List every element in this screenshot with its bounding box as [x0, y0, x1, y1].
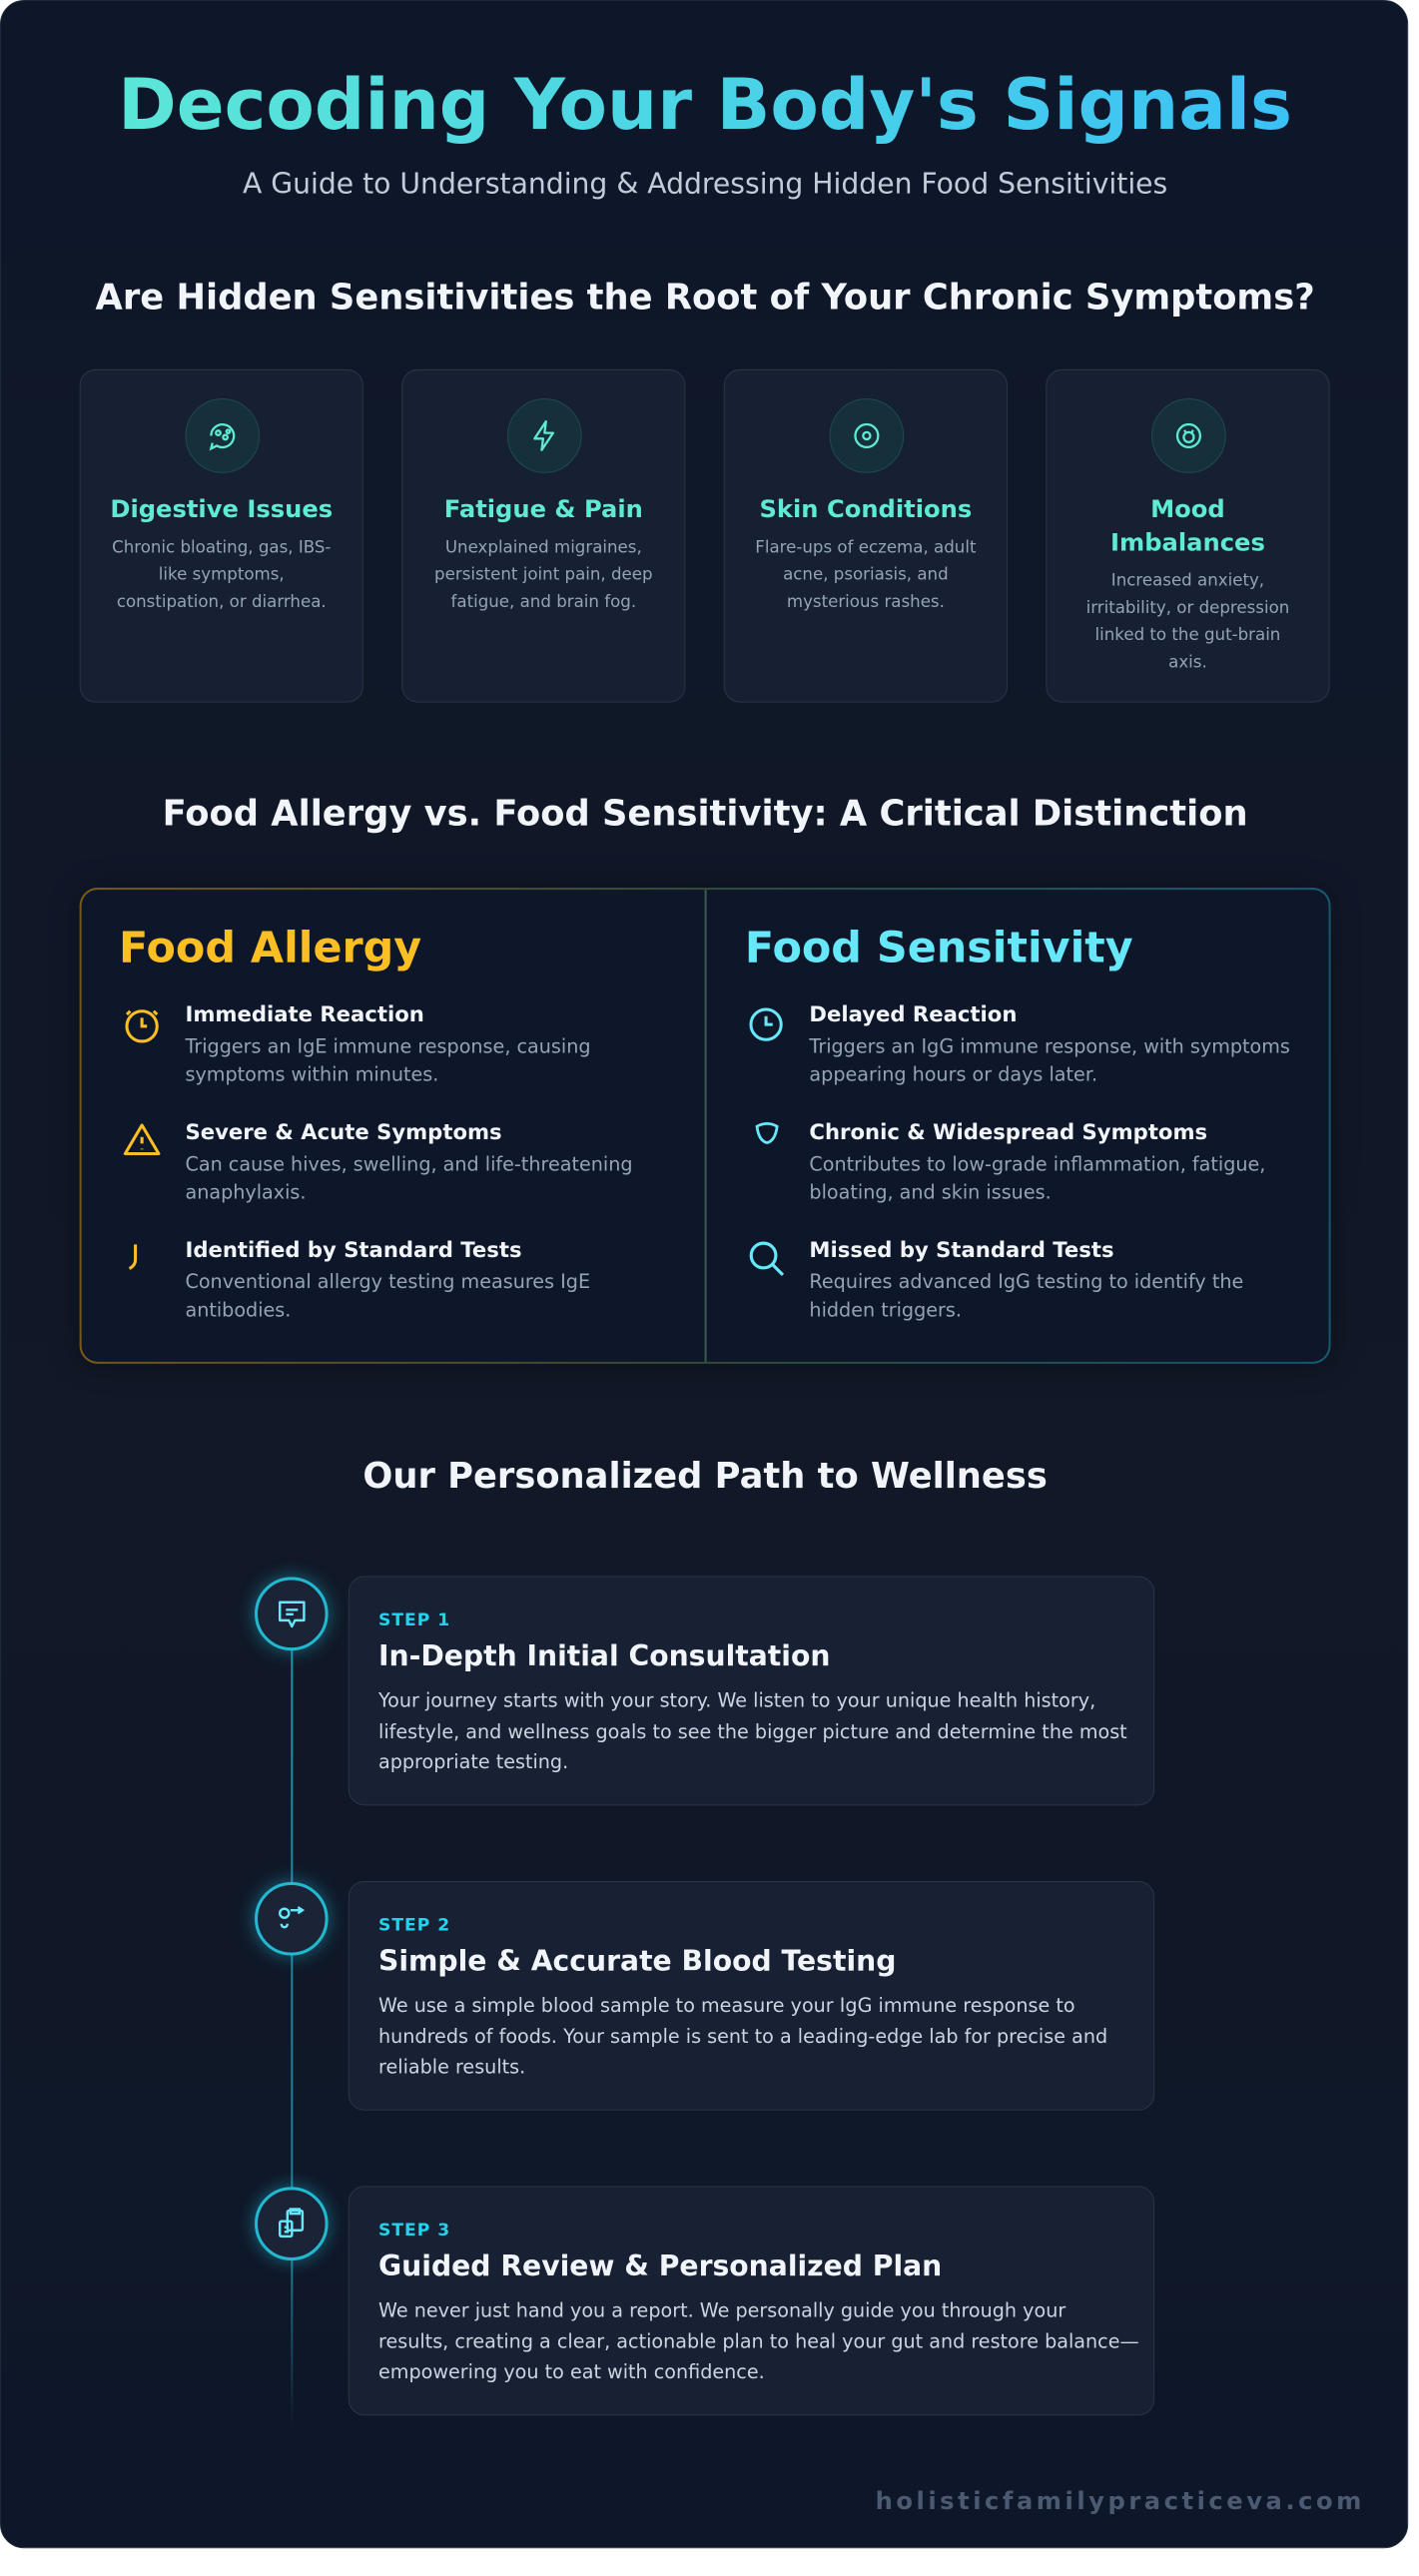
panel: skin: Skin Conditions: [759, 495, 972, 523]
panel: fatigue: [401, 369, 685, 703]
item: chronic symptoms: bloating, and skin issues.: [809, 1181, 1052, 1204]
panel: digestive issues: [80, 369, 363, 703]
panel: step 1: In-Depth Initial Consultation: [378, 1639, 830, 1672]
item: missed by tests: Requires advanced IgG testing to identify the: [809, 1271, 1243, 1293]
panel: step 2: STEP 2: [378, 1915, 450, 1935]
item: immediate reaction: symptoms within minutes.: [185, 1063, 438, 1086]
item: severe symptoms: Can cause hives, swelling, and life-threatening: [185, 1153, 633, 1175]
footer url: holisticfamilypracticeva.com: [876, 2487, 1365, 2515]
item: severe symptoms: [124, 1120, 633, 1204]
panel: step 2: [349, 1881, 1154, 2111]
item: standard tests: Conventional allergy testing measures IgE: [185, 1271, 590, 1293]
panel: skin: [724, 369, 1008, 703]
icon: lightning: [507, 398, 582, 473]
subtitle: A Guide to Understanding & Addressing Hidden Food Sensitivities: [243, 167, 1167, 201]
panel: fatigue: Fatigue & Pain: [444, 495, 643, 523]
icon: step 3 clipboard: [255, 2187, 329, 2260]
heading: food sensitivity: Food Sensitivity: [745, 924, 1133, 973]
panel: step 1: [349, 1577, 1154, 1805]
item: immediate reaction: Triggers an IgE immune response, causing: [185, 1035, 590, 1057]
panel: step 3: We never just hand you a report. We personally guide you through your: [378, 2299, 1065, 2321]
panel: step 1: STEP 1: [378, 1610, 450, 1630]
item: missed by tests: [749, 1238, 1243, 1322]
panel: digestive issues: Chronic bloating, gas, IBS-like symptoms, constipation, or diarrhea.: [112, 537, 331, 611]
panel: mood: [1046, 369, 1330, 703]
title: Decoding Your Body's Signals: [118, 64, 1292, 146]
panel: mood: Mood: [1150, 495, 1225, 523]
item: severe symptoms: anaphylaxis.: [185, 1181, 306, 1204]
item: standard tests: antibodies.: [185, 1299, 291, 1322]
item: missed by tests: Missed by Standard Tests: [809, 1238, 1114, 1262]
timeline line: [291, 1641, 293, 2426]
panel: mood: Increased anxiety, irritability, or depression linked to the gut-brain axis.: [1086, 571, 1289, 671]
panel: fatigue: Unexplained migraines, persistent joint pain, deep fatigue, and brain fog.: [434, 537, 653, 611]
heading: path to wellness: Our Personalized Path to Wellness: [362, 1457, 1048, 1497]
item: standard tests: [128, 1238, 590, 1322]
item: standard tests: Identified by Standard Tests: [185, 1238, 522, 1262]
item: missed by tests: hidden triggers.: [809, 1299, 962, 1322]
item: delayed reaction: Triggers an IgG immune response, with symptoms: [809, 1035, 1290, 1057]
panel: step 3: results, creating a clear, actionable plan to heal your gut and restore balance—: [378, 2330, 1139, 2352]
panel: step 3: empowering you to eat with confidence.: [378, 2361, 765, 2383]
item: delayed reaction: [749, 1002, 1290, 1086]
panel: step 2: We use a simple blood sample to measure your IgG immune response to hundreds of foods. Your sample is sent to a leading-edge lab for precise and reliable results.: [378, 1995, 1107, 2079]
item: immediate reaction: [126, 1002, 590, 1086]
panel: mood: Imbalances: [1110, 528, 1265, 556]
panel: step 3: [349, 2186, 1154, 2415]
panel: step 3: STEP 3: [378, 2221, 450, 2241]
item: chronic symptoms: Chronic & Widespread Symptoms: [809, 1120, 1207, 1144]
panel: step 1: Your journey starts with your story. We listen to your unique health history, lifestyle, and wellness goals to see the bigger picture and determine the most appropriate testing.: [378, 1689, 1127, 1773]
item: chronic symptoms: Contributes to low-grade inflammation, fatigue,: [809, 1153, 1265, 1175]
panel: step 2: Simple & Accurate Blood Testing: [378, 1944, 896, 1978]
item: immediate reaction: Immediate Reaction: [185, 1002, 424, 1026]
icon: digestive: [185, 398, 260, 473]
item: severe symptoms: Severe & Acute Symptoms: [185, 1120, 502, 1144]
icon: skin: [830, 398, 904, 473]
heading: symptoms: Are Hidden Sensitivities the Root of Your Chronic Symptoms?: [96, 278, 1315, 319]
panel: comparison: [80, 888, 1331, 1364]
heading: food allergy: Food Allergy: [119, 924, 421, 973]
icon: step 1 chat: [255, 1578, 329, 1650]
icon: step 2 blood test: [255, 1882, 329, 1956]
item: delayed reaction: Delayed Reaction: [809, 1002, 1017, 1026]
panel: step 3: Guided Review & Personalized Plan: [378, 2250, 942, 2282]
item: delayed reaction: appearing hours or days later.: [809, 1063, 1097, 1086]
panel: skin: Flare-ups of eczema, adult acne, psoriasis, and mysterious rashes.: [755, 537, 976, 611]
item: chronic symptoms: [755, 1120, 1265, 1204]
panel: digestive issues: Digestive Issues: [110, 495, 333, 523]
icon: mood: [1151, 398, 1226, 473]
heading: comparison: Food Allergy vs. Food Sensitivity: A Critical Distinction: [163, 794, 1248, 835]
